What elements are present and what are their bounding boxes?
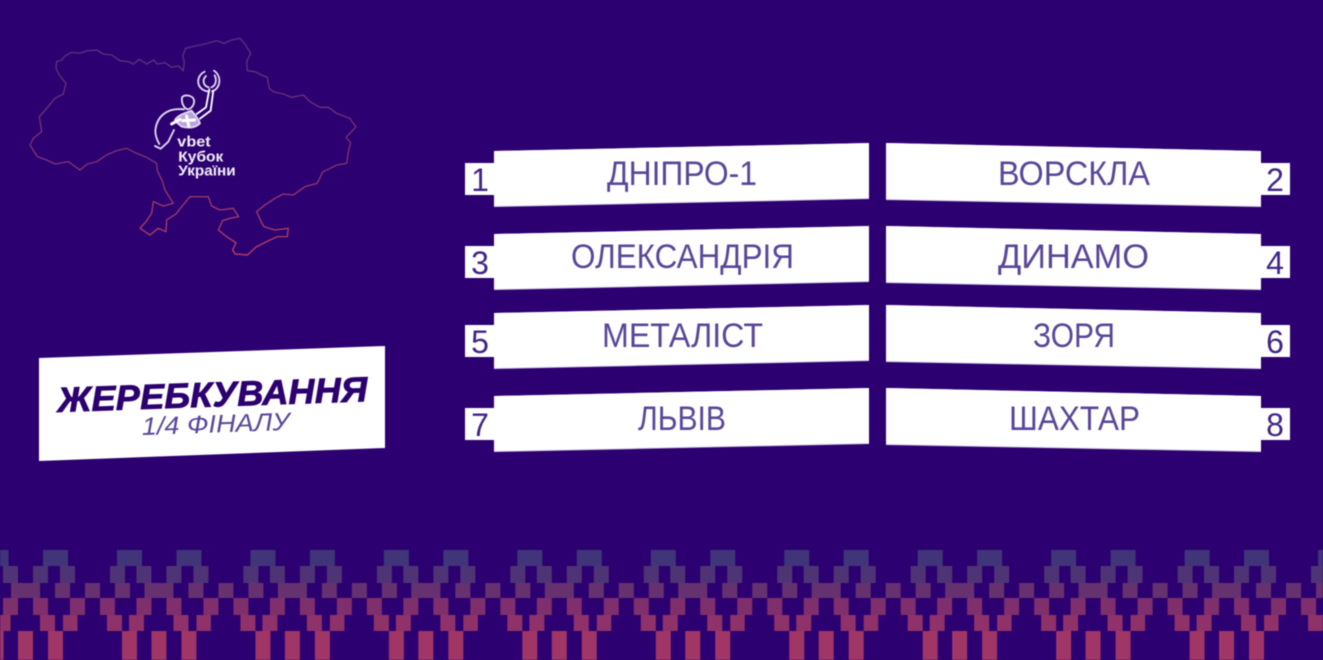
logo wordmark: vbet (177, 135, 211, 151)
team slot 2: 2 (1266, 162, 1284, 198)
logo: map of Ukraine with cup emblem (30, 38, 356, 255)
team slot 6: ЗОРЯ (1033, 317, 1115, 355)
team slot 1 (465, 143, 869, 207)
logo wordmark: України (178, 164, 236, 180)
map outline (30, 38, 356, 255)
team slot 7: ЛЬВІВ (638, 400, 726, 438)
team slot 4 (886, 226, 1290, 290)
team slot 2 (886, 143, 1290, 207)
team slot 4: 4 (1266, 245, 1284, 281)
team slot 5: 5 (471, 324, 489, 360)
team slot 3: 3 (471, 245, 489, 281)
panel: draw title (39, 346, 385, 461)
team slot 7 (465, 388, 869, 452)
team slot 1: ДНІПРО-1 (607, 155, 757, 193)
team slot 8: ШАХТАР (1009, 400, 1140, 438)
team slot 3 (465, 226, 869, 290)
team slot 6 (886, 305, 1290, 369)
team slot 5: МЕТАЛІСТ (602, 317, 763, 355)
team slot 3: ОЛЕКСАНДРІЯ (571, 238, 794, 276)
team slot 8: 8 (1266, 407, 1284, 443)
subheading: 1/4 ФІНАЛУ (141, 408, 293, 441)
heading: ЖЕРЕБКУВАННЯ (55, 370, 370, 420)
logo wordmark (177, 135, 236, 180)
team slot 6: 6 (1266, 324, 1284, 360)
logo wordmark: Кубок (178, 149, 224, 165)
icon: cup emblem figure with horseshoe (155, 71, 219, 149)
embroidery ornament band (0, 550, 1323, 660)
team slot 4: ДИНАМО (998, 238, 1149, 276)
team slot 5 (465, 305, 869, 369)
team slot 1: 1 (471, 162, 489, 198)
team slot 2: ВОРСКЛА (998, 155, 1150, 193)
team slot 8 (886, 388, 1290, 452)
team slot 7: 7 (471, 407, 489, 443)
